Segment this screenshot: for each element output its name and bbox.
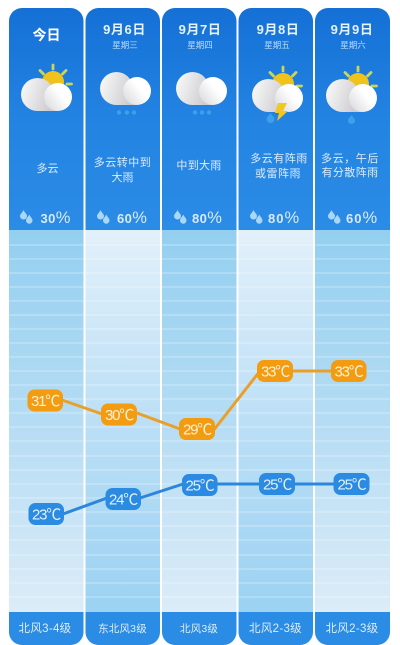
weekday: 星期三	[112, 40, 138, 50]
icon: cloud with rain	[100, 72, 151, 115]
low 24	[106, 488, 141, 510]
low 25	[334, 473, 370, 495]
high 33: 33℃	[261, 364, 290, 380]
high 30: 30℃	[105, 407, 134, 424]
icon: partly cloudy with rain	[326, 67, 377, 124]
weekday: 星期四	[187, 40, 213, 50]
wind bar	[162, 612, 236, 645]
panel: today column	[9, 8, 84, 645]
rain probability: 80%	[268, 209, 300, 227]
chart: low temperature line	[28, 473, 370, 525]
condition text line 2: 有分散阵雨	[322, 165, 378, 179]
icon: cloud with rain	[176, 72, 227, 115]
date heading: 今日	[32, 27, 60, 43]
condition text line 2: 大雨	[112, 170, 134, 184]
rain probability: 80%	[192, 209, 222, 227]
column body background	[162, 230, 236, 612]
high 31	[28, 390, 63, 412]
icon: partly cloudy	[21, 65, 72, 111]
wind bar	[315, 612, 390, 645]
panel: Sep 7 column	[162, 8, 236, 645]
rain probability: 30%	[40, 209, 71, 227]
low 25	[182, 474, 218, 496]
date heading: 9月7日	[179, 22, 221, 37]
date heading: 9月9日	[331, 22, 373, 37]
low 23	[28, 503, 64, 525]
low 24: 24℃	[109, 492, 138, 508]
low 25: 25℃	[337, 476, 367, 494]
low 25	[259, 473, 295, 495]
high 30	[101, 404, 137, 426]
wind text: 北风2-3级	[326, 622, 379, 635]
wind bar	[238, 612, 313, 645]
low 23: 23℃	[32, 506, 61, 524]
date heading: 9月6日	[103, 22, 146, 37]
date heading: 9月8日	[257, 22, 299, 37]
column header background	[162, 8, 236, 230]
chart: high temperature line	[28, 360, 366, 440]
condition text line 2: 或雷阵雨	[255, 166, 301, 180]
column header background	[86, 8, 160, 230]
low 25: 25℃	[185, 478, 215, 494]
weekday: 星期六	[340, 40, 366, 50]
condition text: 中到大雨	[176, 158, 222, 172]
icon: rain drops	[97, 210, 110, 224]
low 25: 25℃	[263, 476, 292, 494]
weekday: 星期五	[264, 40, 290, 50]
high 33	[257, 360, 293, 382]
high 29: 29℃	[183, 422, 212, 438]
high 33	[331, 360, 366, 382]
column body background	[9, 230, 84, 612]
icon: thunderstorm	[252, 67, 303, 123]
icon: rain drops	[250, 210, 262, 224]
column body background	[86, 230, 160, 612]
high temperature connector	[62, 371, 332, 431]
icon: rain drops	[328, 210, 340, 224]
icon: rain drops	[174, 210, 186, 224]
condition text: 多云，午后	[321, 151, 379, 165]
condition text: 多云转中到	[94, 155, 151, 169]
wind bar	[86, 612, 160, 645]
icon: rain drops	[20, 210, 32, 224]
column body background	[238, 230, 313, 612]
column body background	[315, 230, 390, 612]
wind text: 北风2-3级	[249, 622, 302, 635]
column header background	[238, 8, 313, 230]
column header background	[315, 8, 390, 230]
panel: Sep 8 column	[238, 8, 313, 645]
condition text: 多云有阵雨	[250, 151, 308, 165]
panel: Sep 6 column	[86, 8, 160, 645]
low temperature connector	[63, 484, 334, 514]
panel: Sep 9 column	[315, 8, 390, 645]
column header background	[9, 8, 84, 230]
rain probability: 60%	[346, 209, 378, 227]
high 31: 31℃	[31, 393, 60, 410]
wind text: 北风3-4级	[19, 622, 72, 635]
condition text: 多云	[36, 161, 58, 175]
wind bar	[9, 612, 84, 645]
rain probability: 60%	[117, 209, 147, 227]
wind text: 东北风3级	[98, 622, 147, 635]
high 33: 33℃	[334, 364, 364, 380]
high 29	[179, 418, 215, 440]
wind text: 北风3级	[180, 623, 218, 635]
